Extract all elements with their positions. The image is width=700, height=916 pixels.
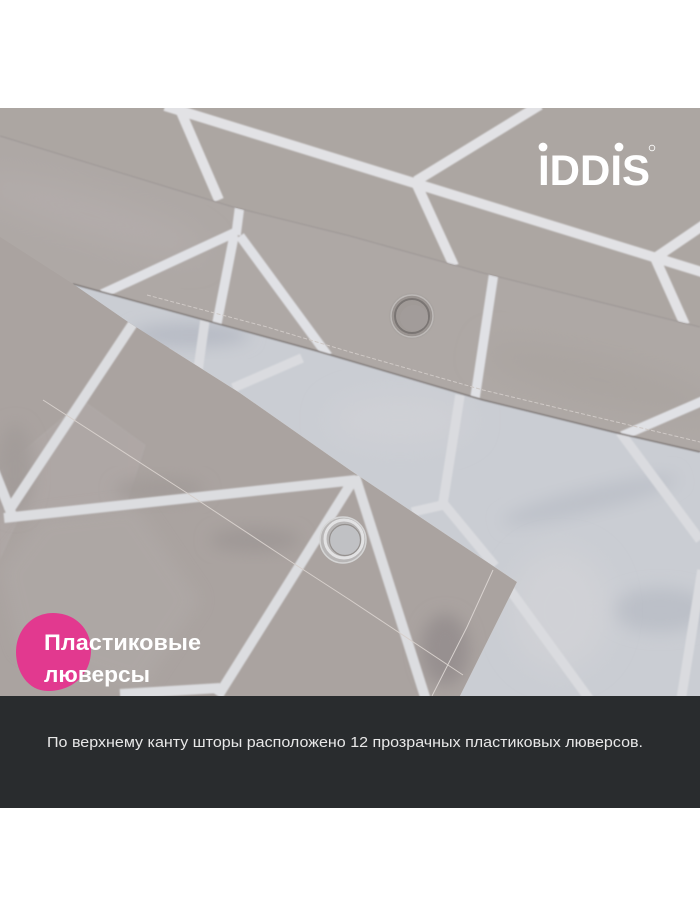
infographic canvas	[0, 108, 700, 808]
logo: IDDIS: IDDIS	[538, 147, 650, 195]
sheer liner panel	[73, 284, 700, 700]
caption band	[0, 696, 700, 808]
heading: люверсы	[44, 662, 150, 687]
photo: shower curtain	[0, 105, 700, 700]
plastic grommet on front panel	[320, 517, 366, 563]
pink accent blob	[16, 613, 91, 691]
back curtain panel	[0, 105, 700, 348]
metal grommet on hem	[390, 294, 434, 338]
front curtain panel	[0, 284, 517, 696]
hem panel	[0, 136, 700, 452]
heading	[44, 630, 201, 687]
caption text: По верхнему канту шторы расположено 12 прозрачных пластиковых люверсов.	[47, 734, 643, 751]
heading: Пластиковые	[44, 630, 201, 655]
